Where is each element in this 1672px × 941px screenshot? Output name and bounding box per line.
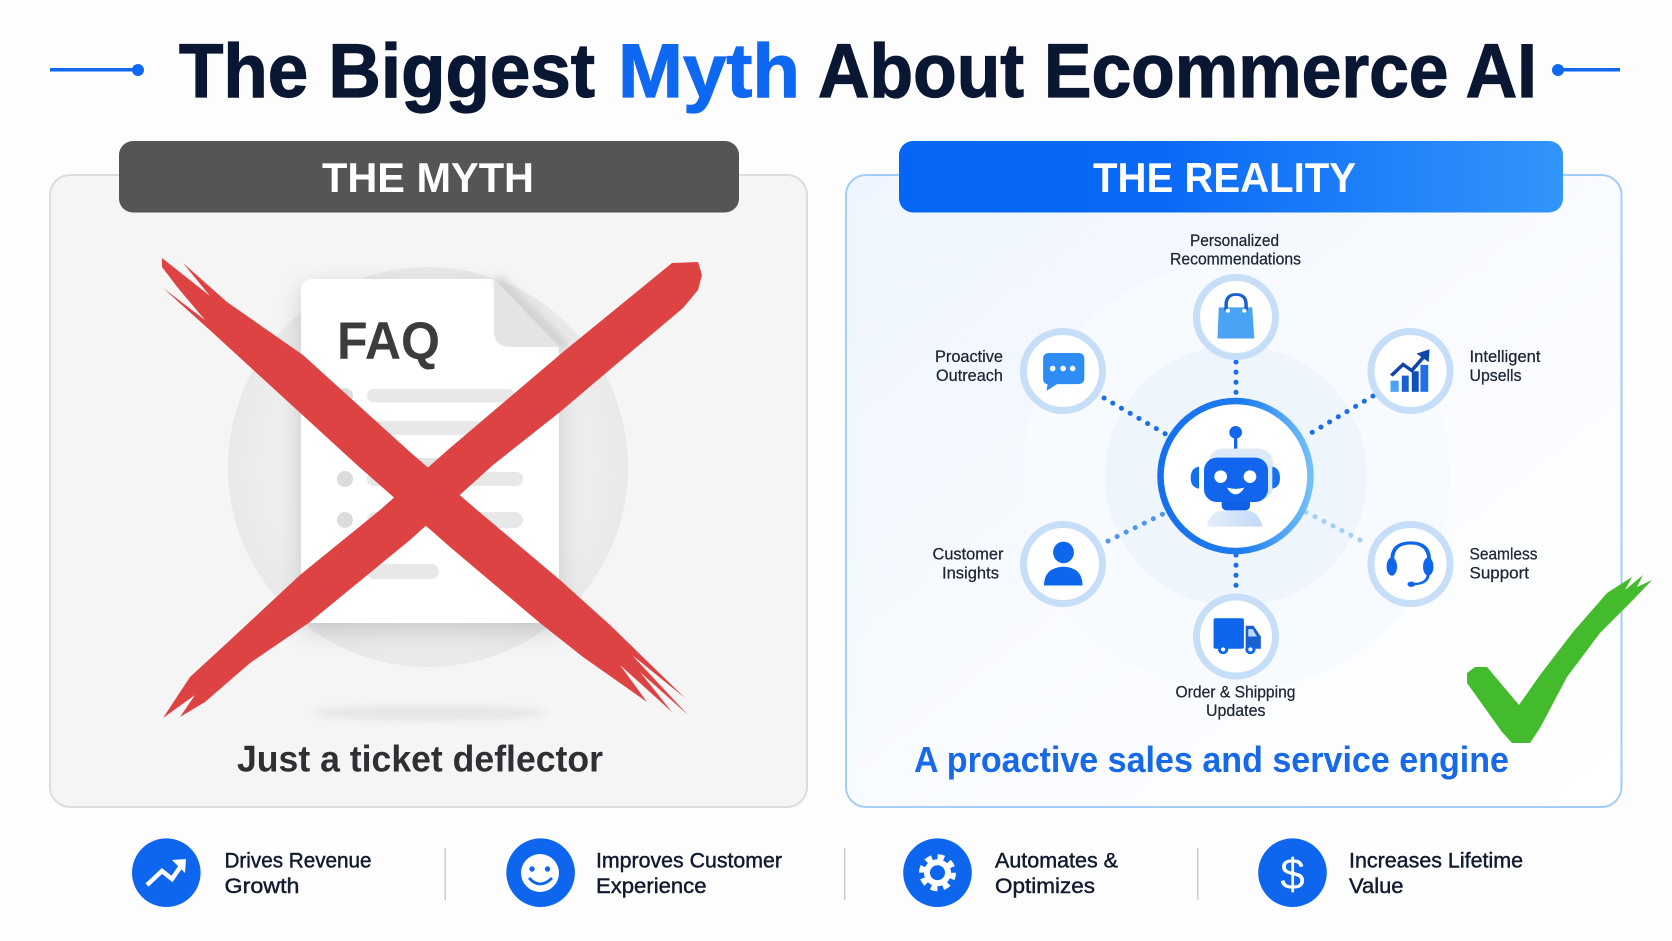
- divider: [444, 848, 446, 900]
- node: proactive outreach: Outreach: [936, 367, 1003, 385]
- node: seamless support: [1371, 524, 1538, 604]
- title: [50, 29, 1620, 114]
- benefit: drives revenue growth: Growth: [224, 874, 300, 898]
- title decoration: right line: [1552, 64, 1620, 76]
- node: intelligent upsells: Intelligent: [1470, 348, 1541, 366]
- benefit: drives revenue growth: Drives Revenue: [224, 848, 372, 872]
- hub ring: [1160, 401, 1310, 551]
- myth caption: Just a ticket deflector: [237, 738, 603, 780]
- icon: FAQ document: FAQ: [337, 312, 440, 371]
- benefit: increases lifetime value: $: [1280, 850, 1305, 899]
- benefit: drives revenue growth: [132, 838, 372, 907]
- gray disc behind document: [228, 267, 628, 667]
- icon: red brush X: [162, 258, 702, 718]
- reality header bar: THE REALITY: [1093, 154, 1356, 201]
- reality panel background: [846, 175, 1622, 807]
- title text: About Ecommerce AI: About Ecommerce AI: [818, 29, 1537, 114]
- node: order and shipping updates: Order & Shipping: [1176, 684, 1296, 702]
- node: personalized recommendations: Recommendations: [1170, 250, 1301, 268]
- benefit: improves customer experience: Experience: [596, 874, 706, 898]
- node: intelligent upsells: [1371, 332, 1541, 410]
- node: seamless support: Seamless: [1470, 546, 1538, 564]
- icon: FAQ document: [301, 279, 566, 623]
- benefits row: [132, 838, 1523, 907]
- benefit: improves customer experience: [506, 838, 782, 907]
- hub halo circles: [1022, 262, 1450, 690]
- node: customer insights: [932, 524, 1102, 604]
- title decoration: left line: [50, 64, 144, 76]
- myth panel background: [50, 175, 807, 807]
- floor shadow: [312, 705, 548, 721]
- benefit: automates and optimizes: Optimizes: [995, 874, 1095, 898]
- icon: robot: [1191, 426, 1280, 527]
- benefit: automates and optimizes: Automates &: [995, 848, 1118, 872]
- reality caption: A proactive sales and service engine: [914, 739, 1509, 780]
- divider: [1197, 848, 1198, 900]
- node: seamless support: Support: [1470, 564, 1529, 582]
- reality header bar: [899, 141, 1563, 212]
- benefit: automates and optimizes: [903, 838, 1118, 907]
- panel: the reality: [846, 141, 1652, 807]
- benefit: increases lifetime value: [1258, 838, 1523, 907]
- node: customer insights: Customer: [932, 546, 1004, 564]
- myth header bar: [119, 141, 739, 212]
- title text: The Biggest: The Biggest: [179, 29, 595, 114]
- title text: Myth: Myth: [618, 29, 800, 114]
- myth header bar: THE MYTH: [322, 154, 534, 201]
- benefit: improves customer experience: Improves Customer: [596, 848, 782, 872]
- benefit: increases lifetime value: Value: [1349, 874, 1404, 898]
- node: order and shipping updates: Updates: [1206, 702, 1266, 720]
- node: proactive outreach: Proactive: [935, 348, 1003, 366]
- node: order and shipping updates: [1176, 597, 1296, 720]
- panel: the myth: [50, 141, 807, 807]
- connector lines: [1104, 362, 1373, 592]
- node: proactive outreach: [935, 332, 1102, 410]
- node: intelligent upsells: Upsells: [1470, 367, 1522, 385]
- icon: green check mark: [1467, 575, 1652, 743]
- benefit: increases lifetime value: Increases Lifetime: [1349, 848, 1523, 872]
- divider: [844, 848, 846, 900]
- node: personalized recommendations: Personalized: [1190, 232, 1279, 250]
- node: customer insights: Insights: [942, 564, 999, 582]
- node: personalized recommendations: [1170, 232, 1301, 356]
